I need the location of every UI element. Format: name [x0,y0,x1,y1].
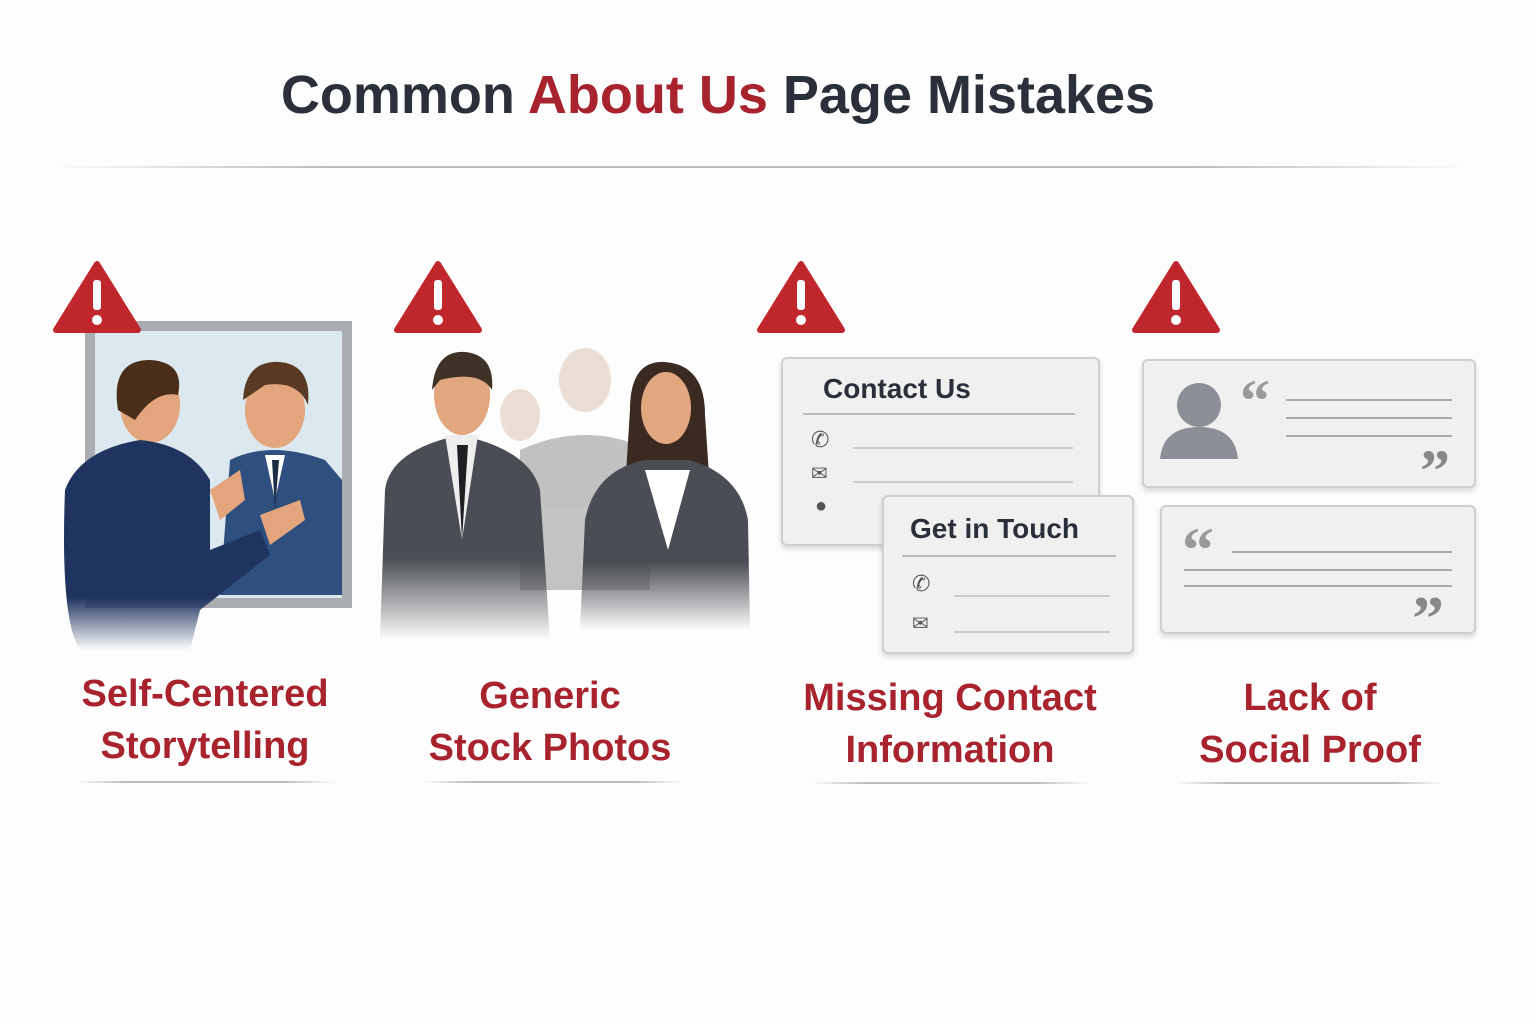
card: testimonial 1 [1142,359,1476,488]
card: testimonial 2: ” [1412,583,1444,654]
card: contact us: ✆ [811,427,829,452]
icon: warning 3 [757,261,845,333]
card: testimonial 2 [1160,505,1476,634]
label: generic stock photos [429,675,671,769]
card: testimonial 2: “ [1182,514,1214,585]
label: self-centered storytelling: Storytelling [100,725,310,767]
card: contact us: ✉ [811,463,828,485]
card: testimonial 1: “ [1240,368,1270,434]
card: get in touch [882,495,1134,654]
icon: warning 1 [53,261,141,333]
icon: warning 4 [1132,261,1220,333]
label: generic stock photos: Generic [479,675,621,717]
card: contact us [781,357,1100,546]
label: missing contact information: Information [846,729,1054,771]
label: self-centered storytelling: Self-Centered [81,673,329,715]
illustration: man at mirror [64,321,352,648]
card: get in touch: ✆ [912,571,930,596]
card: get in touch: ✉ [912,613,929,635]
label: self-centered storytelling [81,673,329,767]
label: missing contact information: Missing Contact [803,677,1097,719]
label: lack of social proof: Lack of [1243,677,1377,719]
card: testimonial 1: ” [1420,438,1450,504]
card: contact us: ● [815,495,827,517]
illustration: stock photo people [380,348,750,636]
card: contact us: Contact Us [823,373,971,404]
label: lack of social proof [1199,677,1421,771]
label: missing contact information [803,677,1097,771]
label: lack of social proof: Social Proof [1199,729,1421,771]
card: get in touch: Get in Touch [910,513,1079,544]
icon: warning 2 [394,261,482,333]
title: Common About Us Page Mistakes [281,65,1155,125]
label: generic stock photos: Stock Photos [429,727,671,769]
